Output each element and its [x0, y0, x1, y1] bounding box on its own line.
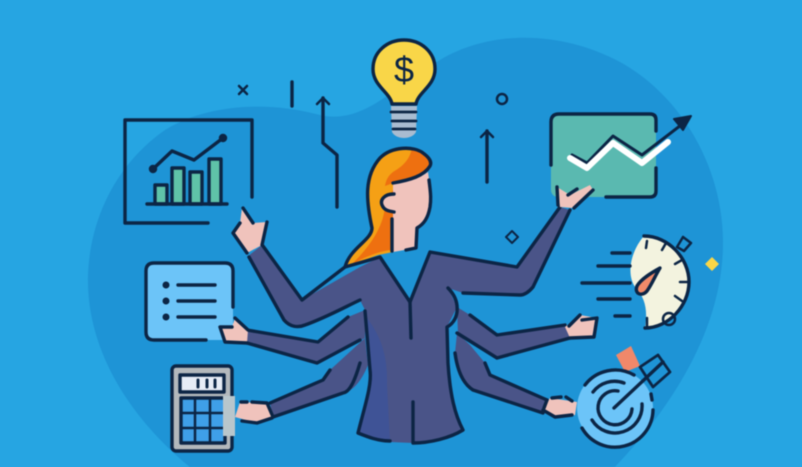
- woman: upper arms and torso: [247, 207, 570, 443]
- icon: calculator: [172, 366, 235, 451]
- hand: top left outline: [233, 208, 267, 253]
- woman: hair: [345, 148, 431, 267]
- icon: list card: [146, 263, 233, 340]
- icon: bar chart frame: [125, 120, 252, 223]
- icon: stopwatch: [582, 236, 691, 328]
- hand: top left pointing: [233, 208, 267, 253]
- background blob: [88, 38, 723, 467]
- woman: hair shadow: [349, 148, 430, 267]
- icon: orange note: [616, 346, 640, 372]
- woman: blazer shadow: [359, 318, 390, 442]
- woman: right bottom arm: [455, 333, 547, 413]
- icon: target with arrow: [577, 355, 670, 447]
- woman: hair outline and face lines: [345, 148, 431, 267]
- hand: bottom left: [235, 402, 273, 423]
- hand: bottom right: [543, 397, 577, 417]
- icon: growth chart panel: [551, 114, 691, 197]
- woman: left bottom arm: [270, 338, 368, 417]
- woman: right lower arm: [457, 307, 570, 358]
- decorative marks: [239, 82, 719, 271]
- woman: outline of suit: [247, 207, 570, 443]
- hand: middle right: [565, 315, 597, 338]
- woman: left middle arm: [247, 310, 365, 363]
- hand: top right: [557, 185, 593, 208]
- icon: light bulb with dollar: [373, 40, 435, 138]
- hand: middle left: [220, 318, 248, 343]
- icon: light bulb with dollar: $: [394, 49, 414, 90]
- woman: face and neck: [393, 172, 430, 252]
